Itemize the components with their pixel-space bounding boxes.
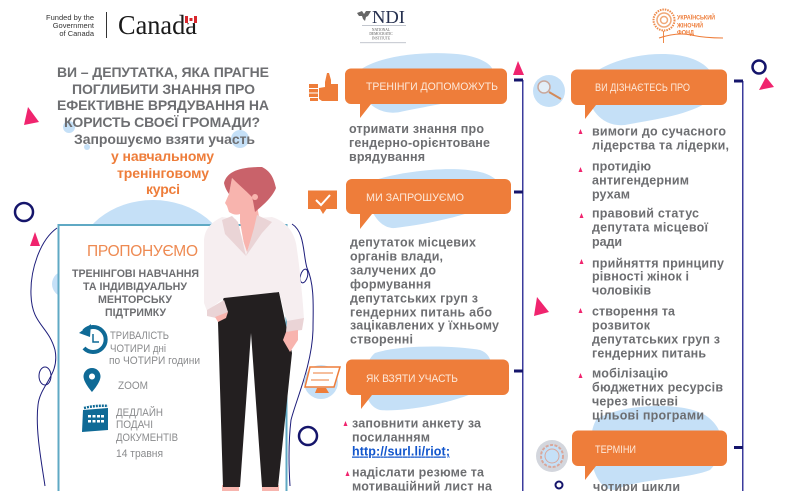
body text: залучених до xyxy=(350,264,436,278)
duration text: по ЧОТИРИ години xyxy=(109,355,200,367)
bullet list: рухам xyxy=(592,188,630,202)
title block: ВИ – ДЕПУТАТКА, ЯКА ПРАГНЕ xyxy=(57,64,269,80)
body text: гендерно-орієнтоване xyxy=(349,136,490,150)
icon: checklist board xyxy=(304,365,340,399)
bullet list: мобілізацію xyxy=(592,366,668,380)
body text: зацікавлених у їхньому xyxy=(350,318,499,332)
panel heading: ПРОПОНУЄМО xyxy=(87,243,198,260)
body text: гендерних питань або xyxy=(350,306,492,320)
hair xyxy=(224,167,276,212)
bullet list: розвиток xyxy=(592,318,651,332)
timeline lines xyxy=(514,78,744,491)
panel description xyxy=(72,268,199,319)
bubble heading: ТЕРМІНИ xyxy=(595,444,636,456)
logo: NDI: INSTITUTE xyxy=(372,36,391,40)
bullet list: через місцеві xyxy=(592,394,678,408)
blob xyxy=(364,347,491,410)
decorative pale-blue dots behind title xyxy=(63,121,249,150)
speech bubble xyxy=(345,68,507,118)
bullet list: http://surl.li/riot; xyxy=(352,444,450,458)
section: dates xyxy=(536,406,727,491)
section: trainings will help xyxy=(309,53,507,164)
bullet list: вимоги до сучасного xyxy=(592,124,726,138)
right cuff and hand xyxy=(286,318,304,332)
bullet list: гендерних питань xyxy=(592,346,706,360)
logo: Ukrainian Women's Fund xyxy=(654,10,723,43)
bullet list: створення та xyxy=(592,304,676,318)
last bullet line over blob: цільові програми xyxy=(592,408,704,422)
body text: врядування xyxy=(349,150,425,164)
logo: NDI: DEMOCRATIC xyxy=(369,32,393,36)
deadline text: ДОКУМЕНТІВ xyxy=(116,432,178,444)
deadline text: ПОДАЧІ xyxy=(116,419,153,431)
panel description: МЕНТОРСЬКУ xyxy=(98,294,172,306)
speech bubble xyxy=(571,70,727,119)
section: how to participate xyxy=(304,347,509,491)
icon: location pin xyxy=(84,368,100,392)
body text xyxy=(349,122,490,164)
bullet list: лідерства та лідерки, xyxy=(592,138,729,152)
bullet list: рівності жінок і xyxy=(592,270,689,284)
blue blob behind offer panel xyxy=(52,200,229,324)
bubble heading: ВИ ДІЗНАЄТЕСЬ ПРО xyxy=(595,82,690,94)
body text: отримати знання про xyxy=(349,122,484,136)
section: you will learn xyxy=(533,54,729,409)
body text: формування xyxy=(350,278,431,292)
logo: NDI: NATIONAL xyxy=(372,28,390,32)
duration text xyxy=(109,330,200,367)
blob xyxy=(369,169,500,228)
bullet list: ради xyxy=(592,235,622,249)
speech bubble xyxy=(346,179,511,229)
logo: NDI xyxy=(357,7,406,43)
deadline text: 14 травня xyxy=(116,448,163,460)
logo: Ukrainian Women's Fund: УКРАЇНСЬКИЙ xyxy=(677,14,715,22)
speech bubble xyxy=(572,430,727,480)
left cuff and hand xyxy=(207,300,228,318)
icon: gear xyxy=(536,440,568,472)
logo: Government of Canada: Funded by the xyxy=(46,13,94,22)
section: we invite xyxy=(308,169,511,346)
icon: magnifier xyxy=(533,75,565,107)
icon: calendar xyxy=(82,406,108,432)
thin wavy lines around panel xyxy=(31,224,313,486)
blouse xyxy=(204,217,304,322)
bullet list: правовий статус xyxy=(592,206,699,220)
duration text: ЧОТИРИ дні xyxy=(110,343,166,355)
deadline text xyxy=(116,406,178,460)
bullet list: чоловіків xyxy=(592,284,651,298)
title block: тренінговому xyxy=(117,165,209,181)
blob xyxy=(590,406,722,490)
neck and face xyxy=(225,178,260,255)
logo: Ukrainian Women's Fund: ЖІНОЧИЙ xyxy=(676,22,703,30)
panel description: ПІДТРИМКУ xyxy=(105,307,166,319)
ear xyxy=(252,194,258,200)
body text: депутаток місцевих xyxy=(350,236,476,250)
deadline text: ДЕДЛАЙН xyxy=(116,406,163,419)
bullet list xyxy=(578,124,729,408)
bubble heading: МИ ЗАПРОШУЄМО xyxy=(366,192,464,204)
location text: ZOOM xyxy=(118,380,148,392)
body text: органів влади, xyxy=(350,250,443,264)
title block: ЕФЕКТИВНЕ ВРЯДУВАННЯ НА xyxy=(57,97,269,113)
bullet list: депутатських груп з xyxy=(592,332,720,346)
illustration: woman xyxy=(204,167,304,491)
panel: what we offer xyxy=(58,225,286,491)
logo: NDI: NDI xyxy=(372,7,405,27)
title block: Запрошуємо взяти участь xyxy=(74,131,255,147)
panel description: ТА ІНДИВІДУАЛЬНУ xyxy=(83,281,187,293)
icon: thumbs up xyxy=(309,73,338,101)
icon: clock with arrow xyxy=(79,324,106,352)
bullet list: антигендерним xyxy=(592,174,689,188)
logo: Ukrainian Women's Fund: ФОНД xyxy=(677,30,695,36)
logo: Government of Canada: Government xyxy=(53,21,95,30)
bullet list: протидію xyxy=(592,160,651,174)
blouse collar xyxy=(222,215,272,256)
bullet list: посиланням xyxy=(352,430,430,444)
icon: checkmark box xyxy=(308,190,337,214)
logo: Government of Canada: Canada xyxy=(118,10,197,40)
title block: курсі xyxy=(146,181,180,197)
panel description: ТРЕНІНГОВІ НАВЧАННЯ xyxy=(72,268,199,280)
title block: КОРИСТЬ СВОЄЇ ГРОМАДИ? xyxy=(64,114,260,130)
title block xyxy=(57,64,269,197)
body text: створенні xyxy=(350,332,413,346)
body text: депутатських груп з xyxy=(350,292,478,306)
logo: Government of Canada: of Canada xyxy=(59,29,95,38)
bullet list xyxy=(344,416,493,491)
bullet list: прийняття принципу xyxy=(592,256,724,270)
logo: Government of Canada xyxy=(46,10,197,40)
bubble heading: ЯК ВЗЯТИ УЧАСТЬ xyxy=(366,373,458,385)
bullet list: бюджетних ресурсів xyxy=(592,380,723,394)
bullet list: надіслати резюме та xyxy=(352,466,485,480)
trousers xyxy=(218,292,292,487)
duration text: ТРИВАЛІСТЬ xyxy=(110,330,169,342)
bullet list: депутата місцевої xyxy=(592,220,708,234)
bubble heading: ТРЕНІНГИ ДОПОМОЖУТЬ xyxy=(366,81,498,93)
title block: у навчальному xyxy=(111,148,214,164)
body text xyxy=(350,236,499,346)
blob xyxy=(588,54,716,125)
bullet list: заповнити анкету за xyxy=(352,416,482,430)
blob xyxy=(359,53,494,113)
title block: ПОГЛИБИТИ ЗНАННЯ ПРО xyxy=(72,81,255,97)
speech bubble xyxy=(346,360,509,409)
feet xyxy=(222,485,279,491)
